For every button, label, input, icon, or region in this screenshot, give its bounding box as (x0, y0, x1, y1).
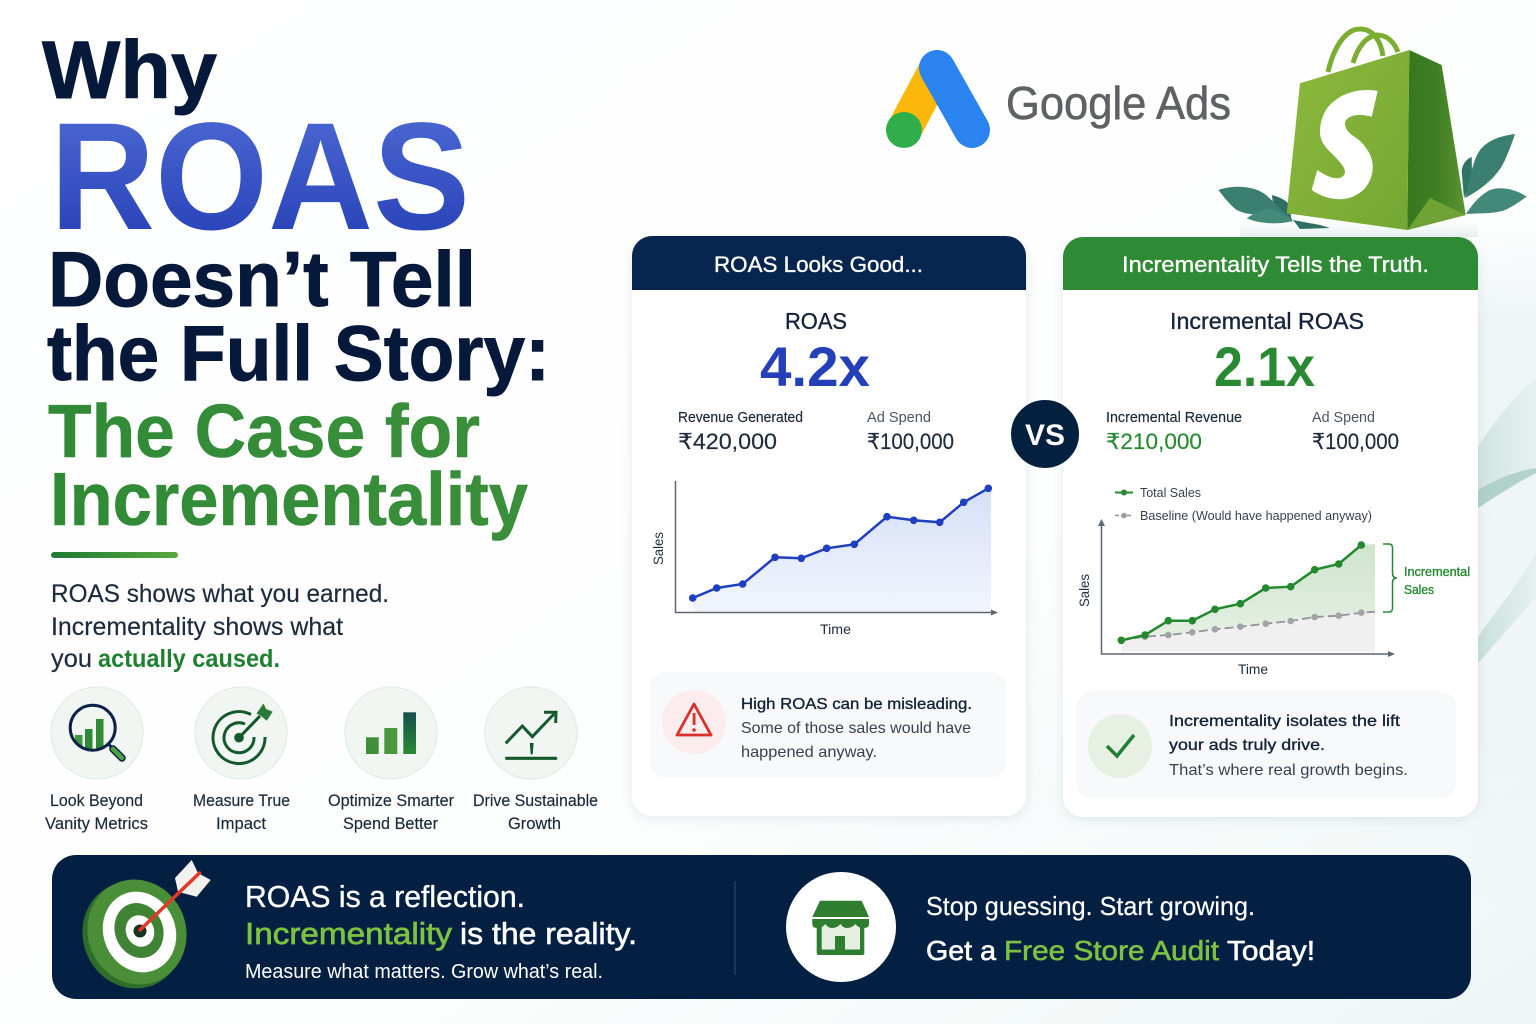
stat: revenue generated: Revenue Generated (678, 410, 803, 426)
stat: incremental revenue: ₹210,000 (1106, 429, 1202, 454)
stat: incremental revenue: Incremental Revenue (1106, 410, 1242, 426)
callout: incrementality isolates the lift: Incrementality isolates the lift (1169, 713, 1401, 730)
title: Incrementality (50, 457, 528, 541)
panel: incrementality tells the truth (1063, 237, 1478, 817)
benefit: measure true impact: Impact (216, 815, 266, 833)
benefit: optimize smarter: Optimize Smarter (328, 792, 454, 810)
title: Why (42, 25, 217, 116)
benefit: optimize smarter (328, 687, 454, 833)
icon: bullseye with dart (66, 860, 211, 1004)
benefit: look beyond vanity metrics (45, 687, 148, 833)
line chart: ROAS sales over time (651, 481, 998, 637)
stat: revenue generated (678, 410, 803, 454)
icon: target with arrow (213, 704, 273, 764)
annotation: incremental sales bracket (1383, 544, 1470, 612)
call to action: Today! (1227, 935, 1315, 966)
annotation: incremental sales bracket: Incremental (1404, 565, 1470, 579)
footer banner (52, 855, 1471, 1004)
icon: check mark (1088, 714, 1152, 778)
line chart: ROAS sales over time: Sales (651, 532, 666, 565)
subheading (51, 580, 389, 673)
stat: ad spend (1312, 410, 1399, 454)
leaves (1218, 134, 1527, 229)
stat: ad spend: ₹100,000 (1312, 429, 1399, 454)
panel header: ROAS Looks Good... (714, 252, 923, 277)
icon: Shopify bag with leaves (1218, 29, 1527, 237)
benefit: look beyond vanity metrics: Vanity Metrics (45, 815, 148, 833)
callout: incrementality isolates the lift: your ads truly drive. (1169, 737, 1325, 754)
metric: incremental ROAS (1170, 308, 1364, 398)
call to action: Stop guessing. Start growing. (926, 891, 1255, 921)
panel: ROAS looks good (632, 236, 1026, 816)
metric: incremental ROAS: Incremental ROAS (1170, 308, 1364, 334)
callout: high ROAS warning: happened anyway. (741, 744, 877, 761)
annotation: incremental sales bracket: Sales (1404, 583, 1434, 597)
benefit: measure true impact (193, 687, 290, 833)
title underline (51, 552, 178, 558)
callout: high ROAS warning (650, 672, 1006, 778)
VS badge (1010, 399, 1080, 469)
icon: bar chart (366, 712, 416, 754)
call to action (926, 891, 1315, 966)
stat: ad spend: Ad Spend (1312, 410, 1375, 426)
title: ROAS (50, 91, 470, 262)
line chart: total vs baseline sales: Sales (1077, 574, 1092, 607)
stat: ad spend: ₹100,000 (867, 429, 954, 454)
chart legend: Total Sales (1140, 485, 1201, 500)
subheading: you (51, 645, 92, 673)
stat: revenue generated: ₹420,000 (678, 429, 777, 454)
line chart: total vs baseline sales (1077, 519, 1395, 677)
banner message: is the reality. (460, 916, 637, 951)
title (42, 25, 550, 541)
VS badge: VS (1025, 419, 1065, 452)
title: the Full Story: (47, 309, 550, 397)
banner message: Measure what matters. Grow what’s real. (245, 961, 603, 983)
metric: ROAS: 4.2x (760, 335, 870, 398)
title: Doesn’t Tell (48, 235, 476, 323)
benefit: look beyond vanity metrics: Look Beyond (50, 792, 143, 810)
banner message: Incrementality (245, 916, 453, 951)
panel header: Incrementality Tells the Truth. (1122, 252, 1429, 277)
line chart: ROAS sales over time: Time (820, 621, 851, 637)
icon: storefront (786, 872, 896, 982)
call to action: Free Store Audit (1004, 935, 1219, 966)
icon: magnifier with bars (70, 705, 122, 758)
chart legend: Baseline (Would have happened anyway) (1140, 508, 1372, 523)
stat: ad spend (867, 410, 954, 454)
banner message: ROAS is a reflection. (245, 879, 525, 914)
callout: high ROAS warning: High ROAS can be misleading. (741, 696, 972, 713)
logo: Google Ads (886, 68, 1231, 148)
Shopify S (1312, 90, 1378, 199)
panel header (1063, 237, 1478, 290)
line chart: total vs baseline sales: Time (1238, 661, 1268, 677)
chart legend (1115, 485, 1372, 523)
subheading: actually caused. (98, 645, 280, 673)
title: The Case for (48, 389, 480, 473)
icon: warning triangle (662, 690, 726, 754)
benefit: drive sustainable growth (473, 687, 598, 833)
metric: incremental ROAS: 2.1x (1214, 335, 1315, 398)
icon: growth arrow (505, 712, 557, 760)
ground shadow (1240, 222, 1478, 237)
subheading: Incrementality shows what (51, 613, 343, 641)
callout: incrementality isolates the lift: That’s where real growth begins. (1169, 762, 1408, 779)
benefit: optimize smarter: Spend Better (343, 815, 438, 833)
metric: ROAS: ROAS (785, 308, 847, 334)
stat: ad spend: Ad Spend (867, 410, 931, 426)
benefit: drive sustainable growth: Drive Sustainable (473, 792, 598, 810)
metric: ROAS (760, 308, 870, 398)
subheading: ROAS shows what you earned. (51, 580, 389, 608)
callout: high ROAS warning: Some of those sales would have (741, 720, 971, 737)
stat: incremental revenue (1106, 410, 1242, 454)
banner message (245, 879, 637, 983)
callout: incrementality isolates the lift (1076, 691, 1456, 798)
logo: Google Ads: Google Ads (1006, 77, 1231, 129)
benefit: drive sustainable growth: Growth (508, 815, 561, 833)
benefit: measure true impact: Measure True (193, 792, 290, 810)
call to action: Get a (926, 935, 996, 966)
handles (1328, 29, 1398, 72)
panel header (632, 236, 1026, 290)
